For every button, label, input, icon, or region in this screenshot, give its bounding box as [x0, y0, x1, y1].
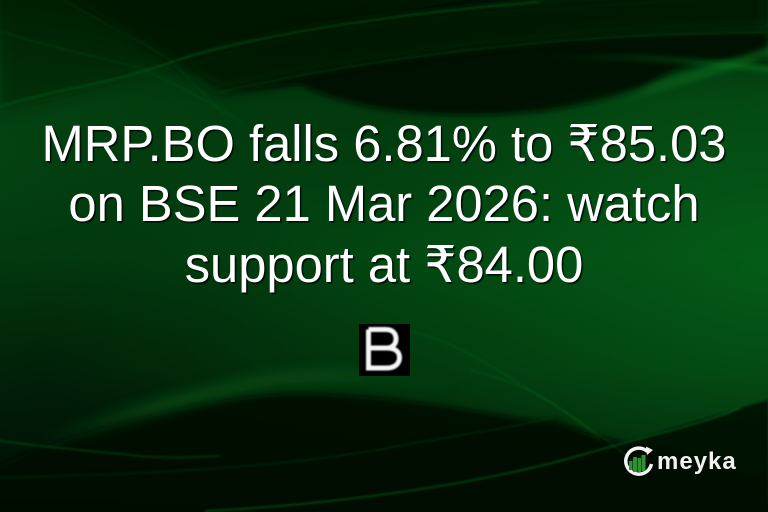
title: support at ₹84.00: [185, 236, 583, 292]
bottom dark region: [0, 394, 768, 512]
title: [42, 114, 726, 294]
title: MRP.BO falls 6.81% to ₹85.03: [42, 114, 726, 172]
logo: meyka brand: [624, 446, 737, 476]
title: on BSE 21 Mar 2026: watch: [68, 175, 700, 232]
logo wordmark: meyka: [657, 448, 737, 475]
icon: B ticker logo: [359, 324, 410, 376]
top dark region: [60, 0, 540, 62]
icon: meyka circular chart mark: [624, 446, 654, 476]
